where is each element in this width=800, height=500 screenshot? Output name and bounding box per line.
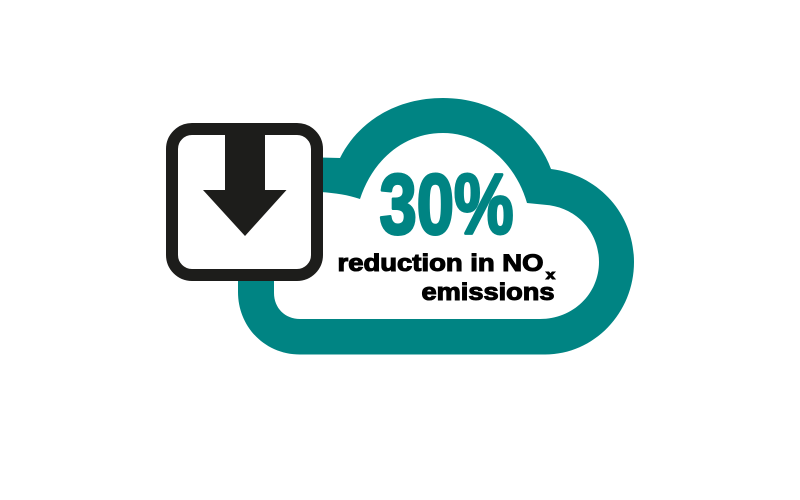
down arrow bbox=[203, 134, 286, 236]
text: reduction in NOx emissions: emissions bbox=[422, 279, 554, 306]
icon: teal cloud outline bbox=[238, 98, 634, 354]
text: reduction in NOx emissions: x bbox=[546, 267, 556, 282]
icon: down arrow box bbox=[172, 129, 317, 275]
text: reduction in NOx emissions bbox=[338, 250, 556, 306]
text: reduction in NOx emissions: reduction in NO bbox=[338, 250, 544, 277]
headline: 30%: 30% bbox=[380, 158, 514, 252]
